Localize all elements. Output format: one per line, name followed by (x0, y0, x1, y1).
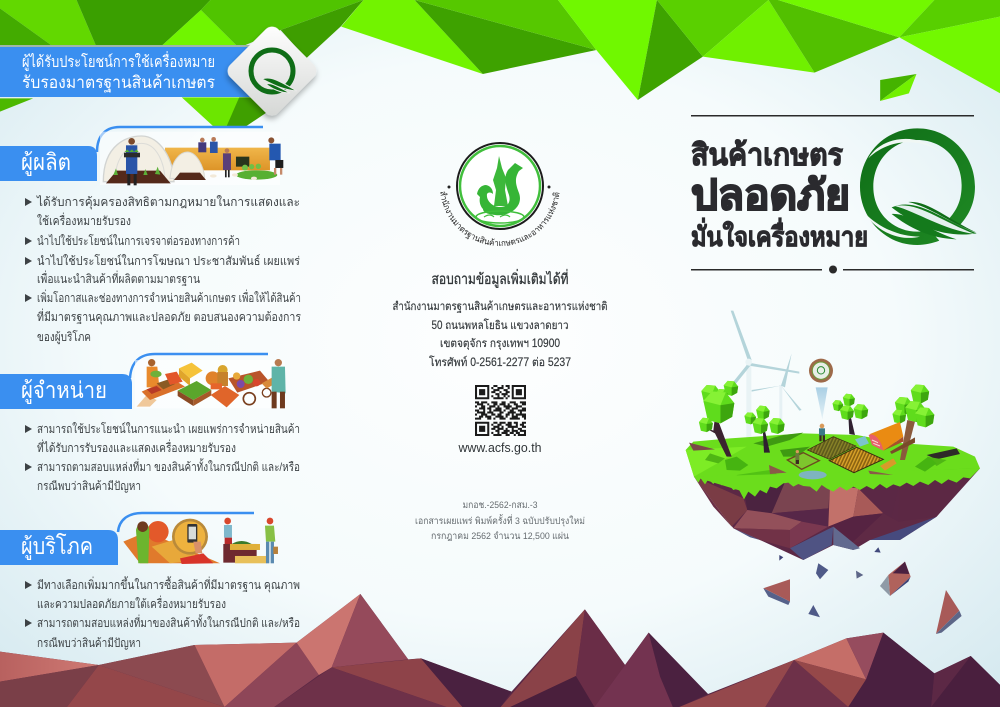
bullets: producers: นำไปใช้ประโยชน์ในการโฆษณา ประชาสัมพันธ์ เผยแพร่ (37, 254, 301, 268)
rock underside (694, 467, 980, 560)
illustration: shoppers with QR check (123, 518, 278, 564)
bullets: distributors: สามารถใช้ประโยชน์ในการแนะนำ เผยแพร่การจำหน่ายสินค้า (37, 422, 300, 436)
banner heading (22, 51, 215, 93)
bullets: consumers: กรณีพบว่าสินค้ามีปัญหา (37, 636, 141, 650)
bottom rule with dot (691, 266, 974, 274)
section heading tab: producers: ผู้ผลิต (21, 149, 71, 176)
illustration: farmers and greenhouse (100, 132, 283, 185)
top green polygon border (0, 0, 1000, 127)
bottom mountain border (0, 594, 1000, 707)
panel: benefits banner (0, 23, 320, 119)
location pin with Q badge (809, 359, 833, 419)
bullets: distributors (25, 422, 300, 493)
bullets: consumers: และความปลอดภัยภายใต้เครื่องหมายรับรอง (37, 595, 226, 611)
bullets: producers: ที่มีมาตรฐานคุณภาพและปลอดภัย ตอบสนองความต้องการ (37, 308, 301, 325)
illustration: market stalls (135, 359, 286, 408)
top rule (691, 115, 974, 116)
banner bar (0, 45, 250, 97)
falling rocks (763, 547, 962, 634)
bullets: producers: ใช้เครื่องหมายรับรอง (37, 212, 131, 228)
bullets: producers (25, 195, 301, 345)
trees (699, 381, 937, 472)
QR code (475, 385, 526, 436)
illustration: floating farm island (686, 311, 980, 634)
icon: agency seal (440, 142, 560, 246)
contact heading: สอบถามข้อมูลเพิ่มเติมได้ที่ (432, 269, 568, 288)
panel: consumers (0, 513, 300, 650)
contact address (392, 300, 608, 369)
barn (855, 422, 915, 454)
icon: large Q logo (860, 128, 977, 245)
bullets: consumers (25, 576, 300, 650)
contact address: โทรศัพท์ 0-2561-2277 ต่อ 5237 (429, 355, 571, 369)
contact address: เขตจตุจักร กรุงเทพฯ 10900 (440, 338, 560, 350)
bullets: distributors: กรณีพบว่าสินค้ามีปัญหา (37, 479, 141, 493)
icon: agency seal: สำนักงานมาตรฐานสินค้าเกษตรและอาหารแห่งชาติ (440, 191, 560, 246)
panel: distributors (0, 354, 300, 493)
banner heading: รับรองมาตรฐานสินค้าเกษตร (22, 73, 215, 93)
panel: producers (0, 127, 301, 345)
publication note (415, 500, 585, 542)
bullets: consumers: สามารถตามสอบแหล่งที่มาของสินค้าทั้งในกรณีปกติ และ/หรือ (37, 614, 300, 630)
bullets: distributors: ที่ได้รับการรับรองและแสดงเครื่องหมายรับรอง (37, 439, 236, 455)
bullets: producers: เพิ่มโอกาสและช่องทางการจำหน่ายสินค้าเกษตร เพื่อให้ได้สินค้า (37, 289, 301, 305)
farmers (795, 424, 825, 464)
crop fields (787, 437, 897, 479)
publication note: เอกสารเผยแพร่ พิมพ์ครั้งที่ 3 ฉบับปรับปรุงใหม่ (415, 514, 585, 527)
title text: มั่นใจเครื่องหมาย (691, 217, 868, 252)
section heading tab: consumers (0, 513, 254, 565)
website: www.acfs.go.th (458, 440, 542, 455)
bullets: distributors: สามารถตามสอบแหล่งที่มา ของสินค้าทั้งในกรณีปกติ และ/หรือ (37, 458, 300, 474)
icon: small green leaf shard (880, 74, 917, 101)
publication note: กรกฎาคม 2562 จำนวน 12,500 แผ่น (431, 531, 569, 542)
icon: Q logo diamond (224, 23, 320, 119)
title text (691, 139, 868, 252)
title text: สินค้าเกษตร (691, 139, 843, 172)
grass drips (694, 468, 980, 499)
contact address: สำนักงานมาตรฐานสินค้าเกษตรและอาหารแห่งชาติ (392, 300, 608, 313)
section heading tab: producers (0, 127, 263, 181)
bullets: producers: ได้รับการคุ้มครองสิทธิตามกฎหมายในการแสดงและ (36, 195, 300, 210)
section heading tab: consumers: ผู้บริโภค (21, 533, 93, 560)
bullets: consumers: มีทางเลือกเพิ่มมากขึ้นในการซื้อสินค้าที่มีมาตรฐาน คุณภาพ (37, 576, 300, 593)
bullets: producers: นำไปใช้ประโยชน์ในการเจรจาต่อรองทางการค้า (37, 234, 240, 248)
grass top (686, 433, 980, 492)
contact address: 50 ถนนพหลโยธิน แขวงลาดยาว (432, 318, 568, 332)
wind turbines (727, 311, 802, 448)
terrain shadows and chips (689, 433, 960, 475)
title text: ปลอดภัย (691, 172, 850, 218)
banner heading: ผู้ได้รับประโยชน์การใช้เครื่องหมาย (22, 51, 215, 72)
bullets: producers: ของผู้บริโภค (37, 330, 91, 345)
section heading tab: distributors: ผู้จำหน่าย (21, 377, 107, 404)
cover title (691, 115, 977, 274)
section heading tab: distributors (0, 354, 268, 409)
bullets: producers: เพื่อแนะนำสินค้าที่ผลิตตามมาตรฐาน (37, 270, 200, 286)
publication note: มกอช.-2562-กสม.-3 (462, 500, 538, 511)
